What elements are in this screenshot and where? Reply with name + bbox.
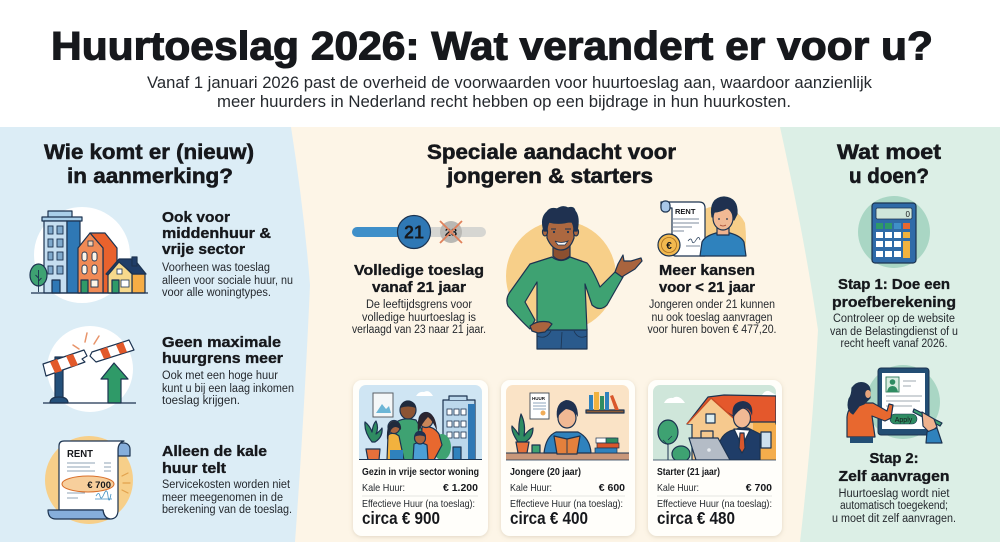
panel: centre background [280, 127, 840, 542]
text block: step 1: proefberekening [832, 294, 956, 311]
text block: step 2: Huurtoeslag wordt niet [838, 488, 950, 500]
icon: buildings [30, 207, 148, 303]
text block: more opportunities: voor < 21 jaar [659, 279, 755, 296]
illustration: rent contract and youth: RENT [675, 207, 696, 216]
card text: starter: Kale Huur: [657, 482, 699, 494]
text block: no max rent [162, 334, 294, 407]
subtitle: Vanaf 1 januari 2026 past de overheid de voorwaarden voor huurtoeslag aan, waardoor aanzienlijk [147, 74, 873, 92]
card: young person [501, 380, 635, 536]
card text: young person: circa € 400 [510, 508, 588, 528]
text block: more opportunities [648, 262, 776, 336]
card text: family: Effectieve Huur (na toeslag): [362, 498, 475, 510]
card image: starter [653, 385, 776, 462]
card text: family: Kale Huur: [362, 482, 405, 494]
text block: step 2 [832, 450, 956, 525]
heading: who qualifies: in aanmerking? [67, 165, 233, 188]
rent label: RENT [67, 448, 94, 460]
text block: bare rent: huur telt [162, 460, 226, 477]
text block: middenhuur: vrije sector [162, 241, 245, 258]
illustration: young man [506, 207, 642, 349]
text block: no max rent: toeslag krijgen. [162, 395, 240, 407]
text block: step 2: automatisch toegekend; [840, 500, 948, 512]
heading: who qualifies [44, 141, 254, 188]
header [51, 24, 933, 111]
title: Huurtoeslag 2026: Wat verandert er voor u? [51, 24, 933, 68]
text block: more opportunities: Jongeren onder 21 kunnen [649, 299, 775, 311]
card: starter [648, 380, 782, 536]
text block: bare rent: Alleen de kale [162, 443, 267, 460]
text block: middenhuur: alleen voor sociale huur, nu [162, 275, 293, 287]
card text: family [362, 466, 479, 528]
heading: what to do: Wat moet [837, 141, 941, 164]
text block: bare rent [162, 443, 292, 516]
text block: step 2: Stap 2: [870, 450, 918, 467]
text block: middenhuur: voor alle woningtypes. [162, 287, 271, 299]
card text: young person: Jongere (20 jaar) [510, 466, 581, 478]
card image: young person: HUUR [532, 396, 546, 401]
rent amount: € 700 [87, 480, 111, 491]
card text: family: Gezin in vrije sector woning [362, 466, 479, 478]
text block: middenhuur: middenhuur & [162, 225, 271, 242]
text block: more opportunities: nu ook toeslag aanvragen [652, 312, 772, 324]
text block: full allowance: verlaagd van 23 naar 21 jaar. [352, 324, 486, 336]
card image: family [359, 385, 482, 460]
text block: bare rent: Servicekosten worden niet [162, 479, 291, 491]
text block: more opportunities: voor huren boven € 477,20. [648, 324, 776, 336]
illustration: rent contract and youth: € [666, 241, 672, 252]
right panel background [780, 127, 1000, 542]
text block: no max rent: Geen maximale [162, 334, 281, 351]
illustration: rent contract and youth [658, 197, 746, 256]
card image: young person [506, 385, 629, 460]
text block: step 1: Controleer op de website [833, 313, 955, 325]
text block: full allowance: vanaf 21 jaar [372, 279, 466, 296]
text block: no max rent: huurgrens meer [162, 350, 283, 367]
heading: young people [427, 141, 676, 188]
heading: who qualifies: Wie komt er (nieuw) [44, 141, 254, 164]
text block: full allowance [352, 262, 486, 336]
card text: starter: circa € 480 [657, 508, 735, 528]
icon: calculator [858, 196, 930, 268]
age slider: 23 [445, 227, 457, 239]
card text: family: € 1.200 [443, 482, 478, 494]
panel: who qualifies [0, 127, 310, 542]
text block: no max rent: kunt u bij een laag inkomen [162, 383, 294, 395]
text block: bare rent: berekening van de toeslag. [162, 504, 292, 516]
card text: young person: Effectieve Huur (na toeslag): [510, 498, 623, 510]
icon: calculator: 0 [906, 210, 911, 219]
text block: full allowance: volledige huurtoeslag is [362, 312, 476, 324]
card text: starter [657, 466, 772, 528]
age slider [352, 216, 486, 248]
panel: young people and starters [352, 141, 782, 536]
text block: step 2: u moet dit zelf aanvragen. [832, 513, 956, 525]
card text: young person: Kale Huur: [510, 482, 552, 494]
card text: family: circa € 900 [362, 508, 440, 528]
text block: step 1: Stap 1: Doe een [838, 276, 950, 293]
card text: young person: € 600 [599, 482, 625, 494]
card: family [353, 380, 488, 536]
text block: middenhuur: Ook voor [162, 209, 230, 226]
text block: step 1: recht heeft vanaf 2026. [840, 338, 948, 350]
text block: middenhuur [162, 209, 293, 299]
icon: rent document [45, 436, 133, 524]
text block: bare rent: meer meegenomen in de [162, 492, 283, 504]
panel: what to do [780, 127, 1000, 542]
text block: full allowance: De leeftijdsgrens voor [366, 299, 472, 311]
heading: young people: jongeren & starters [446, 165, 653, 188]
subtitle [147, 74, 873, 111]
text block: middenhuur: Voorheen was toeslag [162, 262, 270, 274]
card text: starter: Starter (21 jaar) [657, 466, 720, 478]
text block: step 1 [830, 276, 958, 350]
heading: what to do: u doen? [849, 165, 929, 188]
text block: more opportunities: Meer kansen [659, 262, 755, 279]
card text: starter: € 700 [746, 482, 772, 494]
heading: what to do [837, 141, 941, 188]
card text: young person [510, 466, 625, 528]
text block: full allowance: Volledige toeslag [354, 262, 484, 279]
icon: tablet application: Apply [895, 417, 913, 424]
age slider: 21 [404, 222, 424, 242]
text block: no max rent: Ook met een hoge huur [162, 370, 278, 382]
card text: starter: Effectieve Huur (na toeslag): [657, 498, 772, 510]
text block: step 1: van de Belastingdienst of u [830, 326, 958, 338]
text block: step 2: Zelf aanvragen [838, 468, 950, 485]
left panel background [0, 127, 310, 542]
icon: broken barrier [43, 326, 136, 412]
subtitle: meer huurders in Nederland recht hebben op een bijdrage in hun huurkosten. [217, 93, 791, 111]
icon: tablet application [847, 365, 942, 443]
heading: young people: Speciale aandacht voor [427, 141, 676, 164]
